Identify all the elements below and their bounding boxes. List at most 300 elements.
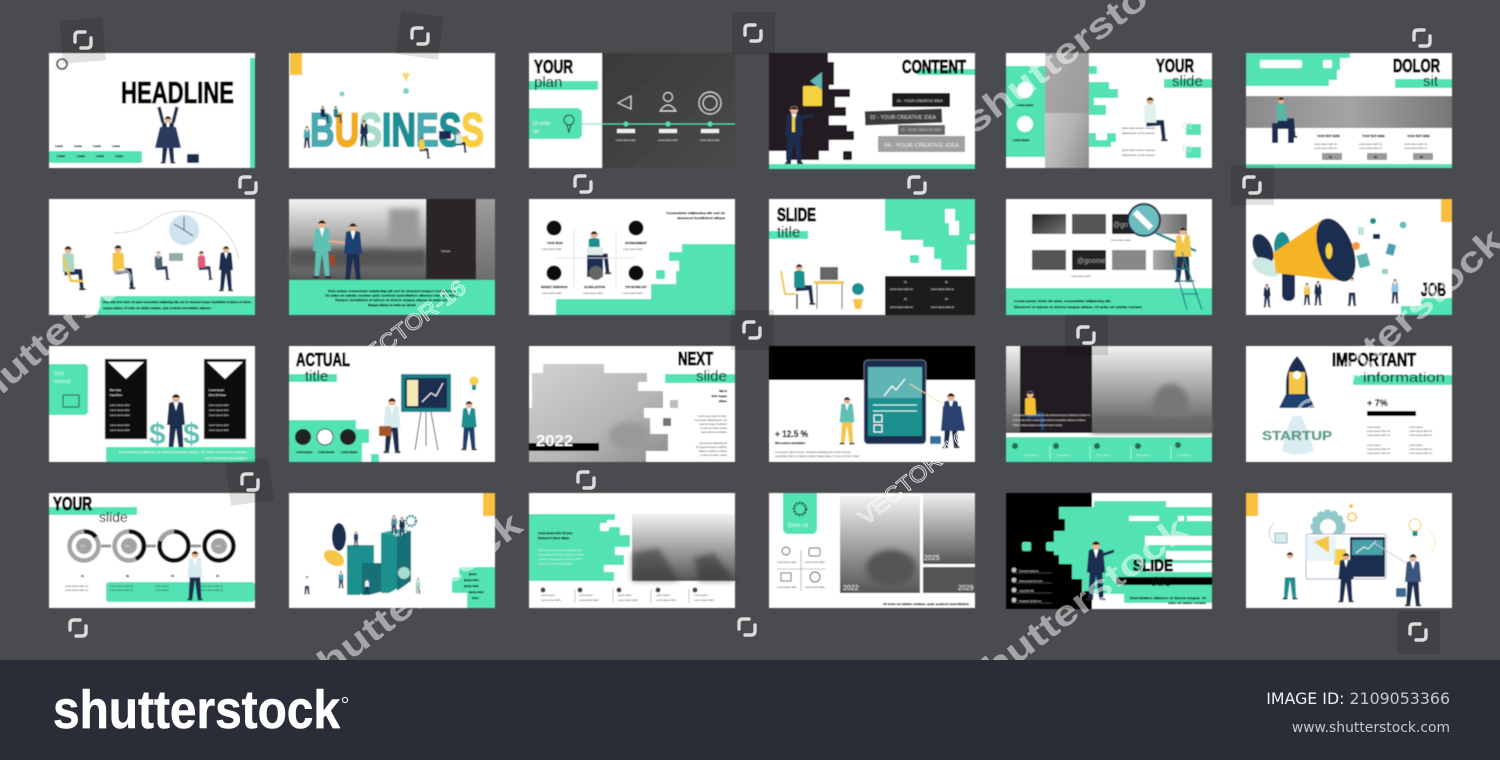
icons: circles: [295, 429, 356, 445]
heading: content: CONTENT: [902, 57, 966, 77]
icons: dollar signs: [149, 418, 200, 451]
text block: [538, 531, 584, 566]
heading: your slide: YOUR: [53, 494, 92, 514]
heading: important information: IMPORTANT: [1332, 350, 1416, 370]
list: creative idea bars: [865, 93, 965, 152]
chart: dashed path and clock: [114, 211, 239, 259]
icons grid: Lorem ipsum dolor: [777, 561, 797, 564]
figure: woman at desk: [781, 264, 844, 309]
slide: icons and teal steps: [529, 199, 735, 315]
heading: headline: HEADLINE: [121, 75, 234, 110]
slide: handshake: [289, 199, 495, 315]
slide: startup: [1246, 346, 1452, 462]
slide: your plan: Ut enim: [533, 121, 550, 127]
chart: presentation board: [401, 374, 451, 450]
figures: team on letters: [304, 106, 467, 159]
slide: headline: [49, 53, 255, 168]
slide: clock team: Duis aute irure dolor sit amet consectetur adipiscing elit, sed do eiusmod tempor incididunt ut labore et dolore: [103, 300, 252, 304]
shape: teal footer: [97, 296, 255, 315]
heading: important information: [1332, 350, 1452, 385]
slide: teal blocks: Ipsum dolor: [464, 584, 479, 588]
slide: your plan: [529, 53, 735, 168]
icon: leaves: [321, 523, 347, 570]
figure: sitting person: [1025, 391, 1046, 432]
slide: your slide: Lorem ipsum: [1013, 138, 1030, 142]
logo: shutterstock: shutterstock: [53, 680, 341, 740]
icons grid: Lorem ipsum dolor: [777, 586, 797, 589]
panel: dark block: [1020, 346, 1092, 433]
text block: quis nostrud exercitation: [701, 431, 728, 434]
watermarks: shutterstock: [954, 507, 1195, 703]
heading: dolor sit: DOLOR: [1393, 56, 1440, 76]
panel: teal tag: nostrud: [54, 379, 71, 385]
slide: circles: 75%: [80, 545, 86, 548]
slide: dark block: Consectetur adipiscing elit sed do eiusmod tempor incididunt ut labore et: [1013, 414, 1090, 417]
labels: 02: [126, 574, 129, 578]
card: right: Lorem ipsum dolor: [209, 404, 229, 407]
slide: dark block: [1006, 346, 1212, 462]
text blocks: Lorem ipsum dolor sit: [1409, 434, 1432, 437]
slide: actual title: Lorem ipsum: [318, 450, 335, 454]
slide: slide title desk: 02: [945, 281, 948, 284]
slide: slide title desk: [769, 199, 975, 315]
slide: circles: 50%: [125, 545, 131, 548]
columns: 03: [1420, 155, 1423, 159]
label: 2022: 2022: [536, 433, 573, 450]
chart: 3d blocks: [347, 529, 411, 595]
slide: business: [289, 53, 495, 168]
numbered notes: adipiscing elit, sed do eiusmod: [1122, 154, 1155, 157]
panel: idea block: [529, 108, 582, 139]
slide: black cards: [49, 346, 255, 462]
slide: black cards: Exercitation ullamco ut labore magna aliqua. Ut enim ad minim veniam: [119, 451, 247, 454]
slide: dark block: Ut enim ad minim veniam quis nostrud exercitation ullamco ut labore: [1013, 419, 1086, 422]
icons: black circles: [546, 220, 644, 280]
stat: growth: [1367, 398, 1416, 416]
slide: actual title: Lorem ipsum: [341, 450, 358, 454]
slide: headline: Lorem: [115, 154, 124, 158]
slide: slide title desk: Lorem ipsum dolor sit: [890, 288, 913, 291]
text blocks: Lorem ipsum: [1409, 426, 1423, 429]
card: right: [204, 359, 246, 439]
photo: street blur: [1006, 346, 1212, 433]
figure: presenter: [785, 106, 813, 164]
slide: handshake: Your text: [441, 250, 451, 253]
slide: handshake: Ut enim ad minim veniam quis nostrud exercitation ullamco laboris nisi ut: [325, 294, 459, 298]
text block: Exercitation ullamco ut labore magna. Ut: [1130, 596, 1206, 600]
slide: headline: Lorem: [96, 154, 105, 158]
text block: do eiusmod tempor incididunt: [696, 446, 727, 449]
numbered notes: [1122, 121, 1201, 158]
slide: handshake: Duis autem consectetur adipiscing elit sed do eiusmod tempor incididunt ut: [328, 289, 456, 293]
shape: teal top right: [885, 199, 975, 270]
icon: tablet chart: [864, 360, 926, 444]
slide: icons and teal steps: Lorem ipsum dolor: [583, 292, 603, 295]
labels: Lorem ipsum dolor sit: [200, 585, 223, 588]
slide: teal blocks: Dolor: [472, 596, 479, 600]
slide: slide title desk: Lorem ipsum dolor sit: [890, 306, 913, 309]
slide: teal blocks: [289, 493, 495, 608]
icon: bulb: [1409, 519, 1435, 553]
card: right: Lorem ipsum dolor: [209, 424, 229, 427]
shape: black stepped panel: [769, 53, 854, 160]
icons: white circles: [1017, 82, 1033, 132]
panel: dark block: [426, 199, 476, 279]
list: creative idea bars: 02 - YOUR CREATIVE IDEA: [870, 115, 937, 121]
watermarks: shutterstock: [1283, 219, 1500, 431]
text block: Nisi ut: [719, 389, 727, 393]
contacts list: Instagram @dolor.sit: [1019, 600, 1041, 603]
labels: Lorem ipsum dolor sit: [65, 585, 88, 588]
slide: your slide: Lorem ipsum: [1017, 103, 1034, 107]
labels: 01: [81, 574, 84, 578]
slide: slide title desk: Lorem ipsum dolor sit: [931, 306, 954, 309]
heading: your slide: YOUR: [1156, 56, 1194, 76]
icon row: [540, 588, 714, 603]
label: startup: STARTUP: [1262, 428, 1332, 443]
slide: content: [769, 53, 975, 169]
text blocks: Lorem ipsum: [1409, 444, 1423, 447]
text blocks: Lorem ipsum dolor sit: [1409, 430, 1432, 433]
text block: aliqua.: [719, 399, 727, 403]
slide: headline: Lorem: [57, 154, 66, 158]
figure: man with pointer: [910, 384, 965, 448]
card: left: Irure Dolor: [110, 394, 122, 397]
icon: gears: [392, 516, 416, 535]
text block: consectetur adipiscing elit, sed: [694, 419, 728, 422]
text blocks: Lorem ipsum: [1367, 426, 1381, 429]
icon: megaphone: [1273, 213, 1363, 301]
slide: circles: [49, 493, 255, 608]
gallery: thumbnails: Lorem ipsum dolor: [1111, 239, 1131, 242]
heading: slide title: title: [1151, 574, 1171, 589]
image id: IMAGE ID: 2109053366: [1266, 689, 1450, 708]
icon: bulb: [470, 376, 478, 390]
slide: your slide: [1006, 53, 1212, 168]
figure: sitting reader: [1145, 97, 1168, 141]
slide: tablet: [769, 346, 975, 462]
slide: actual title: Lorem ipsum: [296, 450, 313, 454]
text block: Eiusmod ut labore aliqua.: [538, 536, 570, 540]
text block: eiusmod tempor incididunt: [699, 423, 727, 426]
figure: man in white: [1283, 552, 1297, 600]
heading: your plan: plan: [534, 74, 562, 91]
stat: growth: Lorem ipsum dolor sit amet, consectetur adipiscing elit, sed do eiusmod: [775, 451, 851, 454]
heading: actual title: ACTUAL: [296, 350, 350, 370]
heading: slide title: [1133, 556, 1173, 589]
text blocks: Lorem ipsum dolor sit: [1409, 452, 1432, 455]
labels: Lorem ipsum dolor sit: [200, 589, 223, 592]
numbered notes: Ipsum dolor sit amet, consectet: [1122, 127, 1155, 130]
heading: your slide: [1156, 56, 1212, 90]
shape: teal corner: [452, 567, 495, 608]
icons: dollar signs: $: [183, 418, 200, 451]
figure: woman: [461, 401, 477, 450]
figure: man with case: [379, 398, 401, 453]
panel: browser screens: [1306, 534, 1386, 579]
card: left: Lorem ipsum dolor: [110, 404, 130, 407]
slide: headline: Lorem: [112, 144, 121, 148]
slide: magnifier thumbnails: Eiusmod ut labore et dolore magna aliqua, Ut enim ad minim veniam: [1014, 305, 1143, 309]
heading: your slide: slide: [99, 509, 128, 525]
website: www.shutterstock.com: [1292, 720, 1450, 736]
slide: slide title desk: 01: [904, 281, 907, 284]
photo: city blur: [289, 199, 495, 280]
slide: icons and teal steps: MARKET RESEARCH: [541, 285, 567, 289]
slide: slide title desk: 03: [904, 298, 907, 301]
slide: circles: 100%: [215, 545, 222, 548]
labels: [65, 574, 223, 592]
icon row: Lorem ipsum dolor: [579, 599, 599, 602]
labels: 04: [216, 574, 219, 578]
heading: slide title: SLIDE: [1133, 556, 1173, 575]
slide: magnifier thumbnails: [1006, 199, 1212, 315]
panel: teal footer: [1006, 288, 1212, 315]
photo: stepped blur: [529, 364, 668, 462]
chart: progress rings: [70, 531, 234, 560]
slide: icons and teal steps: GLOBALIZATION: [584, 285, 605, 289]
heading: your slide: [53, 494, 128, 525]
columns: Lorem ipsum dolor sit: [1404, 147, 1427, 150]
text blocks: Lorem ipsum dolor sit: [1409, 448, 1432, 451]
text block: Consectetur adipiscing elit, sed do: [666, 211, 726, 215]
icon: calendar: [803, 86, 822, 106]
figures: coworkers: [63, 245, 233, 291]
icon row: Lorem ipsum dolor: [694, 599, 714, 602]
slide: teal blocks: Ipsum dolor: [464, 578, 479, 582]
card: left: Lorem ipsum dolor: [110, 424, 130, 427]
slide: black cards: quis nostrud exercitation: [205, 457, 248, 460]
heading: your slide: slide: [1172, 73, 1203, 90]
panel: teal footer: Lorem ipsum: [1024, 454, 1038, 457]
icon: briefcase: [187, 154, 199, 163]
slide: handshake: Magna aliqua ut enim ad minim: [368, 303, 417, 307]
heading: slide title: SLIDE: [777, 205, 816, 225]
stat: growth: [775, 429, 859, 458]
slide: icons and teal steps: Lorem ipsum dolor: [623, 248, 643, 251]
slide: your plan: Lorem ipsum dolor: [616, 139, 636, 142]
stat: growth: Nisi nostrud exercitation: [775, 441, 806, 445]
slide: dolor timeline: Ut enim ad minim veniam, quis nostrud exercitation: [883, 602, 970, 606]
figure: walking man: [1338, 553, 1354, 602]
shape: teal block: [529, 514, 630, 581]
text blocks: Lorem ipsum dolor sit: [1367, 448, 1390, 451]
footer bar: [0, 660, 1500, 760]
heading: next slide: slide: [696, 368, 727, 385]
text block: ullamco ut labore et dolore: [699, 450, 728, 453]
slide: your plan: Lorem ipsum dolor: [700, 139, 720, 142]
columns: 02: [1374, 155, 1377, 159]
card: left: Lorem ipsum dolor: [110, 414, 130, 417]
card: left: Lorem ipsum dolor: [110, 429, 130, 432]
slide: clock team: magna aliqua. Ut enim ad minim veniam, quis nostrud exercitation ullamco: [103, 306, 211, 310]
shape: teal blob: [1054, 501, 1212, 603]
icons: megaphone, person, target: [618, 92, 721, 114]
slides grid: [49, 53, 1452, 609]
slide: actual title: [289, 346, 495, 462]
slide: icons and teal steps: eiusmod incididunt aliqua: [677, 216, 726, 220]
icons grid: Lorem ipsum dolor: [805, 561, 825, 564]
icon: rocket: [1279, 356, 1315, 454]
gallery: thumbnails: [1032, 214, 1187, 278]
text block: dolor magna: [711, 394, 728, 398]
text blocks: Lorem ipsum: [1367, 444, 1381, 447]
contacts list: +0123 56 789: [1019, 590, 1034, 593]
card: left: [105, 359, 147, 439]
text block: [694, 389, 728, 457]
heading: your plan: [534, 57, 573, 91]
slide: teal blocks: Ipsum dolor: [469, 590, 484, 594]
icon row: Lorem ipsum dolor: [618, 599, 638, 602]
labels: Lorem ipsum dolor sit: [110, 585, 133, 588]
icon: leaves: [1248, 231, 1290, 281]
text blocks: Lorem ipsum dolor sit: [1367, 434, 1390, 437]
panel: teal footer: Lorem ipsum: [1096, 454, 1110, 457]
text blocks: Lorem ipsum dolor sit: [1367, 430, 1390, 433]
labels: 03: [171, 574, 174, 578]
list: creative idea bars: 01 - YOUR CREATIVE IDEA: [897, 99, 943, 103]
slide: icons and teal steps: Lorem ipsum dolor: [542, 248, 562, 251]
slide: your plan: Lorem ipsum dolor: [658, 139, 678, 142]
stat: growth: + 7%: [1367, 398, 1388, 408]
heading: slide title: title: [777, 224, 800, 241]
slide: headline: Lorem: [93, 144, 102, 148]
heading: job: JOB: [1421, 280, 1446, 300]
gallery: thumbnails: @gnome: [1077, 258, 1106, 265]
icon: lightbulb: [402, 73, 410, 82]
figure: sitting woman: [1272, 97, 1297, 143]
columns: [1314, 134, 1433, 160]
slide: magnifier thumbnails: Lorem ipsum dolor sit amet, consectetur adipiscing elit,: [1014, 299, 1111, 303]
slide: handshake: Tempor incididunt ut labore et dolore magna aliqua ut enim ad: [335, 298, 448, 302]
columns: Lorem ipsum dolor sit: [1359, 143, 1382, 146]
heading: actual title: [296, 350, 350, 385]
panel: teal footer: [106, 447, 255, 462]
columns: YOUR TEXT HERE: [1407, 134, 1430, 138]
panel: teal footer: [289, 280, 495, 315]
slide: icons and teal steps: ESTABLISHMENT: [625, 241, 647, 245]
figure: thinking man: [187, 551, 203, 600]
stat: growth: + 12.5 %: [775, 429, 808, 439]
card: right: Lorem ipsum dolor: [209, 414, 229, 417]
figure: man on ladder: [1171, 227, 1202, 310]
card: right: Lorem Ipsum: [209, 389, 224, 392]
columns: Lorem ipsum dolor sit: [1314, 147, 1337, 150]
heading: business letters: BUSINESS: [310, 103, 484, 156]
figure: man on wheel: [587, 231, 611, 280]
numbered notes: adipiscing elit, sed do eiusmod: [1122, 132, 1155, 135]
text block: Lorem ipsum dolor sit amet,: [538, 531, 573, 535]
text block: Ut enim ad minim veniam: [700, 427, 727, 430]
slide: your plan: ad: [533, 129, 539, 135]
panel: teal footer: [1006, 437, 1212, 462]
figure: businessman: [167, 394, 185, 452]
list: creative idea bars: 04 - YOUR CREATIVE IDEA: [884, 143, 959, 149]
shape: teal header: [1246, 53, 1350, 86]
icon row: Lorem ipsum: [579, 594, 593, 597]
text block: veniam, quis nostrud exercitation: [538, 562, 574, 566]
icons grid: Lorem ipsum dolor: [805, 586, 825, 589]
panel: teal footer: Lorem ipsum: [1177, 454, 1191, 457]
shape: teal block: [289, 420, 369, 462]
slide: icons and teal steps: Lorem ipsum dolor: [542, 292, 562, 295]
stat: growth: exercitation ullamco ut labore et dolore magna aliqua. Ut enim ad minim veniam: [775, 455, 859, 458]
card: right: Lorem ipsum dolor: [209, 429, 229, 432]
slide: dark block: Dolore magna aliqua ut enim ad minim veniam: [1013, 424, 1062, 427]
panel: teal footer: Lorem ipsum: [1136, 454, 1150, 457]
icon row: Lorem ipsum: [541, 594, 555, 597]
figures and floating icons: [1263, 218, 1406, 307]
photos: 2029: [958, 585, 974, 592]
slide: dolor timeline: [769, 493, 975, 608]
figures: small team: [304, 515, 420, 595]
watermarks: VECTOR-16: [853, 425, 974, 530]
photos: 2025: [924, 555, 940, 562]
card: left: Lorem ipsum dolor: [110, 409, 130, 412]
heading: dolor sit: [1393, 56, 1452, 90]
columns: Lorem ipsum dolor sit: [1314, 143, 1337, 146]
columns: YOUR TEXT HERE: [1362, 134, 1385, 138]
labels: Lorem ipsum: [155, 589, 169, 592]
icon: gear: [1312, 504, 1356, 543]
photos: [840, 493, 975, 593]
shape: teal steps: [1089, 66, 1118, 147]
slide: black and teal: enim ad minim veniam: [1168, 601, 1207, 605]
photo band: [1246, 96, 1452, 128]
label: 2022: [529, 433, 599, 451]
panel: teal tab: [783, 493, 817, 534]
text blocks: [1367, 426, 1432, 455]
text block: Consectetur adipiscing elit: [699, 442, 727, 445]
figure: man with raised arms: [155, 107, 181, 164]
icon: megaphone: [810, 72, 822, 90]
icon row: Lorem ipsum: [694, 594, 708, 597]
shape: teal corner: [1401, 298, 1452, 315]
watermarks: VECTOR-16: [348, 275, 471, 376]
heading: actual title: title: [305, 368, 328, 385]
slide: icons and teal steps: YOUR TEAM: [547, 241, 563, 245]
photo: skyscraper blur: [632, 514, 735, 581]
figure: presenter: [1087, 541, 1114, 600]
figure: man with pointer: [1374, 543, 1421, 606]
icon row: Lorem ipsum: [656, 594, 670, 597]
text block: et dolore magna aliqua. Ut enim ad minim: [538, 558, 582, 561]
text block: Dolor sit amet, consectetur adipiscing elit,: [538, 549, 582, 552]
shape: teal steps: [556, 244, 735, 315]
numbered notes: Ipsum dolor sit amet, consectet: [1122, 149, 1155, 152]
icon: briefcase: [930, 436, 941, 444]
contacts list: Company address: [1019, 570, 1039, 573]
figure: woman: [840, 397, 854, 445]
heading: next slide: [665, 349, 735, 385]
shape: black side: [1006, 493, 1092, 609]
card: left: Duis Aute: [110, 389, 122, 392]
text blocks: Lorem ipsum dolor sit: [1367, 452, 1390, 455]
heading: next slide: NEXT: [678, 349, 713, 369]
heading: important information: information: [1363, 369, 1445, 385]
slide: headline: Lorem: [77, 154, 86, 158]
icon row: Lorem ipsum dolor: [541, 599, 561, 602]
columns: YOUR TEXT HERE: [1317, 134, 1340, 138]
contacts list: [1012, 568, 1052, 603]
watermarks: shutterstock: [289, 502, 530, 698]
labels: Lorem ipsum: [155, 585, 169, 588]
slide: slide title desk: 04: [945, 298, 948, 301]
slide: gears and screens: [1246, 493, 1452, 608]
panel: black stats: [885, 276, 975, 315]
timeline line: [582, 122, 735, 126]
text block: sed do eiusmod tempor incididunt ut labore: [538, 554, 584, 556]
